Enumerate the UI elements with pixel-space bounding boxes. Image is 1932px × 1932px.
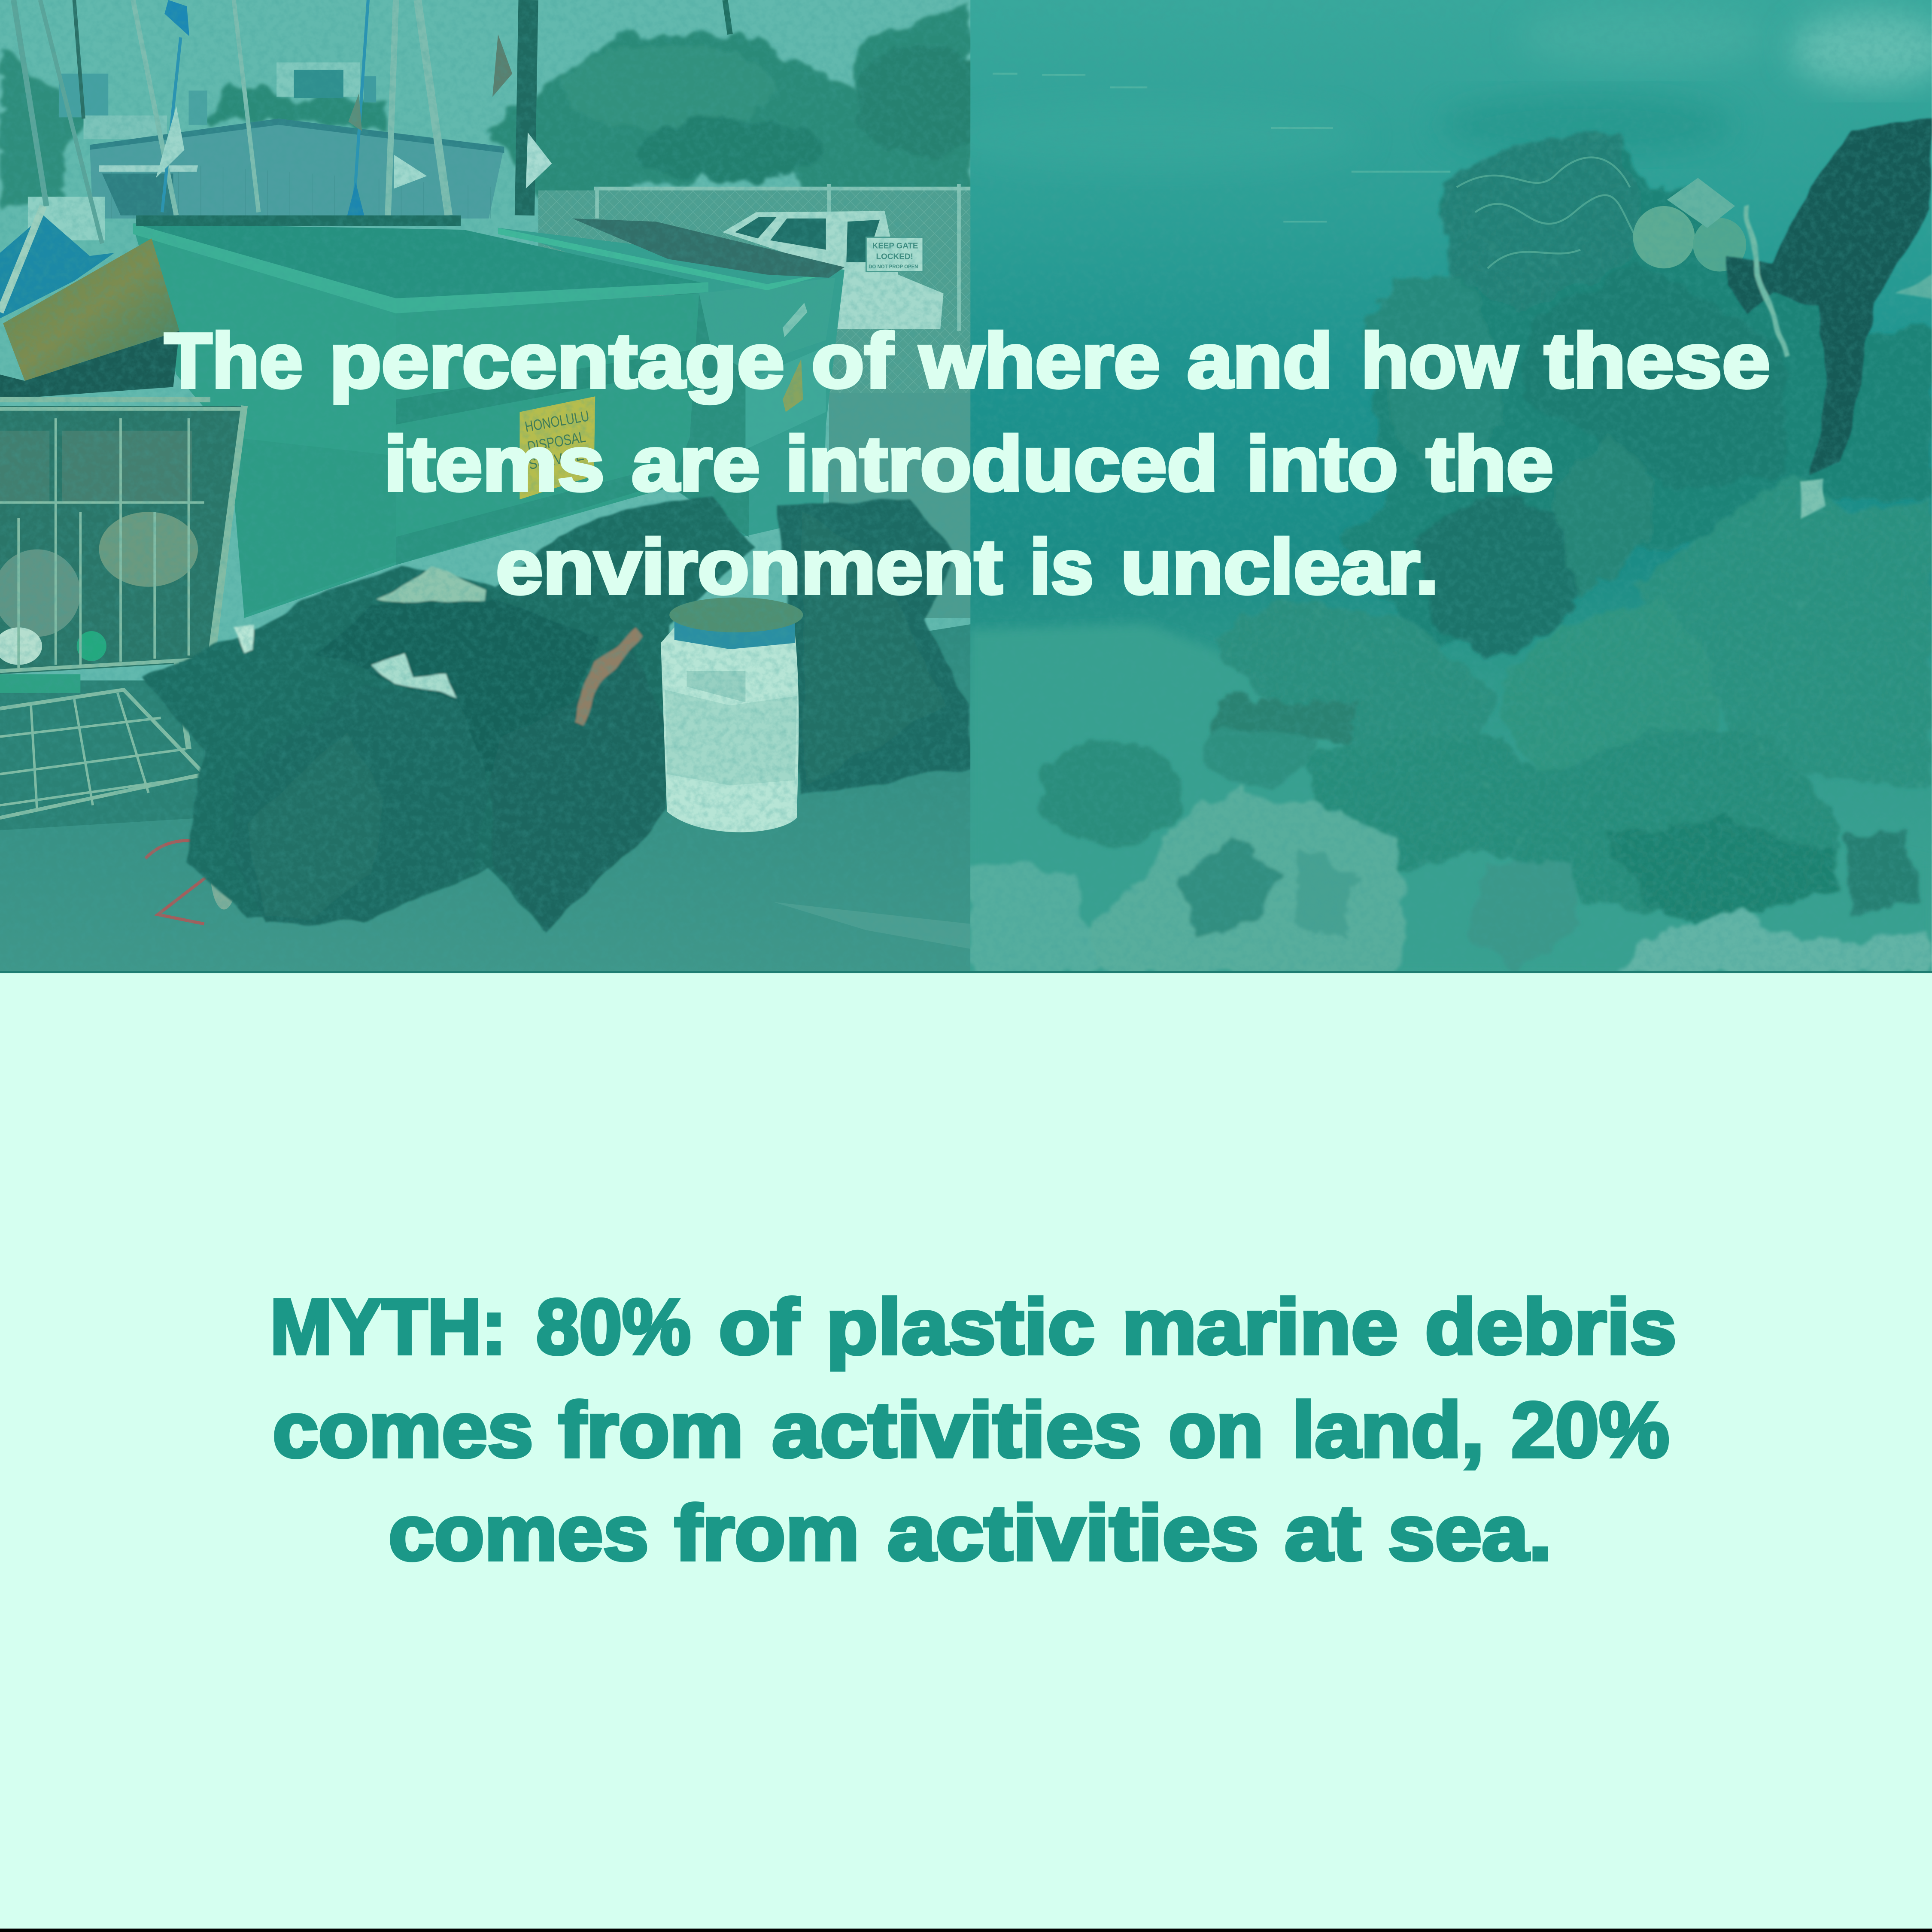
white pickup truck	[723, 211, 944, 329]
myth statement: comes	[389, 1489, 649, 1577]
yellow Honolulu Disposal label: HONOLULU	[524, 408, 590, 435]
yellow foam mattress	[0, 206, 179, 400]
photo: diver removing ghost nets on a reef	[931, 0, 1932, 974]
white pickup truck: LOCKED!	[876, 252, 913, 261]
heading: percentage statement over photos: how	[1361, 318, 1518, 404]
yellow Honolulu Disposal label: SERVICE	[527, 447, 585, 473]
upper net pile	[1339, 134, 1932, 662]
heading: percentage statement over photos: percentage	[329, 318, 784, 404]
myth statement: land,	[1292, 1386, 1484, 1473]
sailboat masts and flags	[14, 0, 730, 243]
heading: percentage statement over photos: where	[919, 318, 1160, 404]
bottom edge strip of photos	[0, 971, 1932, 973]
heading: percentage statement over photos: are	[632, 421, 760, 507]
heading: percentage statement over photos: unclear.	[1121, 524, 1439, 610]
heading: percentage statement over photos: environment	[496, 524, 1002, 610]
heading: percentage statement over photos	[164, 318, 1770, 610]
seabed	[970, 624, 1932, 974]
heading: percentage statement over photos: is	[1030, 524, 1094, 610]
heading: percentage statement over photos: into	[1246, 421, 1398, 507]
myth statement: 80%	[536, 1283, 691, 1370]
blue tarp	[0, 216, 115, 319]
pavement	[0, 624, 971, 974]
background high-rise buildings	[59, 62, 376, 139]
myth statement: on	[1169, 1386, 1264, 1473]
shopping cart with contents	[0, 400, 244, 924]
rear dumpster	[498, 219, 844, 537]
white pickup truck: KEEP GATE	[872, 241, 918, 250]
myth statement: at	[1285, 1489, 1361, 1577]
white pickup truck: DO NOT PROP OPEN	[869, 264, 918, 270]
net tangle and buoys	[1457, 158, 1746, 271]
coral heads	[970, 693, 1932, 974]
myth statement: activities	[887, 1489, 1259, 1577]
diver in black wetsuit	[1726, 118, 1932, 518]
heading: percentage statement over photos: items	[384, 421, 605, 507]
surface light on water	[931, 6, 1932, 222]
front green dumpster	[133, 216, 708, 618]
myth statement: activities	[772, 1386, 1142, 1473]
myth statement: from	[674, 1489, 860, 1577]
chain-link fence	[538, 184, 971, 396]
myth statement: of	[719, 1283, 799, 1370]
myth statement: sea.	[1388, 1489, 1552, 1577]
myth statement: debris	[1425, 1283, 1677, 1370]
background trees	[0, 3, 990, 212]
heading: percentage statement over photos: these	[1544, 318, 1770, 404]
heading: percentage statement over photos: introduced	[785, 421, 1218, 507]
bottom black rule	[0, 1929, 1932, 1932]
boathouse	[28, 118, 504, 240]
myth statement: 20%	[1511, 1386, 1669, 1473]
heading: percentage statement over photos: The	[164, 318, 303, 404]
yellow Honolulu Disposal label: DISPOSAL	[526, 429, 587, 456]
photo grain overlay	[0, 0, 1932, 971]
white water cooler	[661, 597, 803, 832]
myth statement: plastic	[826, 1283, 1095, 1370]
myth statement: MYTH:	[270, 1283, 506, 1370]
heading: percentage statement over photos: of	[811, 318, 893, 404]
lower mounds of fishing net	[1209, 474, 1932, 924]
myth statement	[270, 1283, 1677, 1577]
black garbage bags	[142, 496, 971, 931]
yellow Honolulu Disposal label	[519, 396, 595, 499]
heading: percentage statement over photos: the	[1426, 421, 1553, 507]
myth statement: comes	[273, 1386, 533, 1473]
heading: percentage statement over photos: and	[1187, 318, 1333, 404]
myth statement: from	[559, 1386, 744, 1473]
photo: dumpsters and trash bags on land	[0, 0, 990, 974]
myth statement: marine	[1122, 1283, 1398, 1370]
